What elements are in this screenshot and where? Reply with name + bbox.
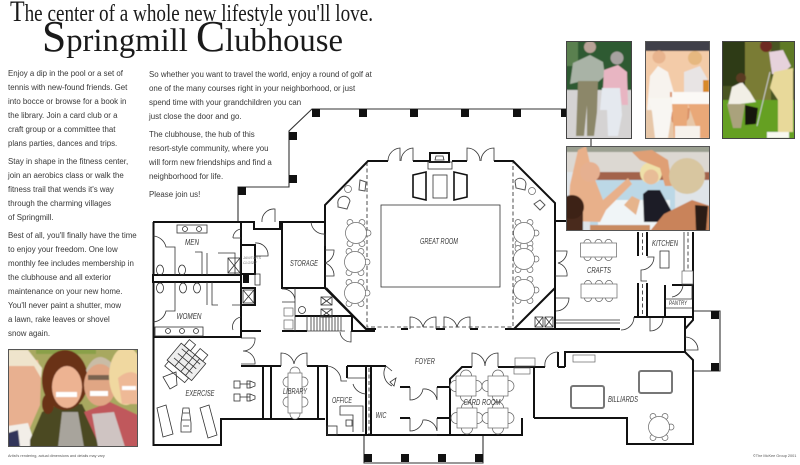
corridor doors (241, 209, 334, 366)
footnote: copyright: ©The McKee Group 2001 (753, 454, 796, 458)
text block: left column: a lawn, rake leaves or shovel (8, 315, 110, 324)
text block: left column: fitness trail that wends it's way (8, 185, 114, 194)
photo: golfers (722, 40, 795, 139)
text block: left column: maintenance on your new home. (8, 287, 122, 296)
wic shelves (368, 368, 370, 434)
text block: left column: the clubhouse and all exterior (8, 273, 111, 282)
room labels: EXERCISE (186, 388, 215, 398)
text block: left column: to enjoy your freedom. One low (8, 245, 118, 254)
text block: middle column: will form new friendships and find a (148, 158, 272, 167)
janitor closet and shafts: JANITOR'S (242, 256, 262, 260)
text block: left column (7, 69, 137, 338)
room labels: CARD ROOM (464, 397, 501, 407)
left wing walls (153, 205, 450, 445)
crafts tables (580, 239, 617, 302)
outer porch outline (238, 109, 720, 463)
great room dashed lines (367, 162, 513, 327)
text block: middle column: So whether you want to travel the world, enjoy a round of golf at (149, 70, 373, 79)
text block: left column: snow again. (8, 329, 50, 338)
room labels: GREAT ROOM (420, 236, 459, 246)
text block: left column: Best of all, you'll finally have the time (8, 231, 137, 240)
text block: middle column: resort-style community, where you (149, 144, 269, 153)
floor plan (153, 109, 720, 463)
text block: left column: monthly fee includes membership in (8, 259, 134, 268)
room labels: OFFICE (332, 395, 352, 405)
text block: middle column: spend time with your grandchildren you can (149, 98, 301, 107)
restroom fixtures (153, 225, 241, 336)
text block: middle column: just close the door and go. (148, 112, 242, 121)
text block: middle column: The clubhouse, the hub of this (149, 130, 255, 139)
room labels: PANTRY (669, 301, 688, 307)
text block: middle column: one of the many courses right in your neighborhood, or just (149, 84, 356, 93)
janitor closet and shafts (228, 243, 268, 305)
porch columns (238, 109, 719, 462)
text block: left column: join an aerobics class or walk the (7, 171, 124, 180)
room labels: CRAFTS (587, 265, 611, 275)
title: Springmill Clubhouse: Springmill Clubhouse (42, 12, 343, 61)
room labels: KITCHEN (652, 238, 679, 248)
text block: left column: Stay in shape in the fitness center, (8, 157, 128, 166)
text block: left column: Enjoy a dip in the pool or a set of (8, 69, 124, 78)
room labels: LIBRARY (283, 386, 308, 396)
room labels: BILLIARDS (608, 394, 638, 404)
entry doors (410, 387, 437, 435)
text block: left column: tennis with new-found friends. Get (8, 83, 128, 92)
photo: pool group (560, 146, 710, 231)
text block: left column: craft group or a committee that (8, 125, 116, 134)
great room floor rectangle (381, 205, 500, 287)
room labels: MEN (185, 237, 200, 247)
text block: left column: the library. Join a card club or a (8, 111, 118, 120)
text block: middle column: Please join us! (149, 190, 200, 199)
text block: middle column (148, 70, 373, 199)
room labels: STORAGE (290, 258, 318, 268)
billiard tables (571, 371, 672, 408)
fireplace and seating (413, 153, 467, 200)
text block: left column: of Springmill. (8, 213, 54, 222)
great room walls (325, 161, 620, 329)
footnote: rendering disclaimer: Artist's rendering, actual dimensions and details may vary (8, 454, 105, 458)
photo: four smiling friends (8, 347, 143, 447)
library table (283, 367, 308, 419)
text block: left column: plans parties, dances and trips. (8, 139, 117, 148)
great room tables (338, 178, 545, 306)
room labels (176, 236, 688, 420)
text block: left column: You'll never paint a shutter, mow (8, 301, 121, 310)
great room doors (388, 148, 494, 329)
text block: left column: into bocce or browse for a book in (8, 97, 126, 106)
text block: middle column: neighborhood for life. (149, 172, 223, 181)
card room tables (450, 370, 514, 434)
room labels: WOMEN (176, 311, 202, 321)
east wing walls (400, 203, 693, 444)
stairs and service area (282, 288, 351, 342)
photo: couple at table (645, 41, 710, 139)
office furniture (327, 366, 396, 435)
billiards round table (648, 414, 674, 440)
janitor closet and shafts: CLOSET (243, 261, 258, 265)
photo: couple walking (566, 41, 632, 139)
room labels: WIC (376, 410, 387, 420)
men and women divider (153, 275, 241, 282)
exercise equipment (157, 337, 255, 438)
room labels: FOYER (415, 356, 435, 366)
text block: left column: through the charming villages (8, 199, 111, 208)
east wing doors and details (472, 232, 698, 374)
